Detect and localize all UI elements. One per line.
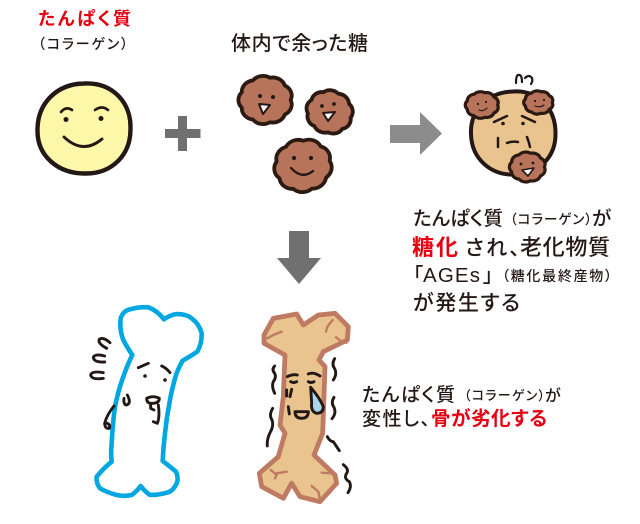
text: AGEs explanation: AGEs [423, 264, 480, 287]
icon: aged face with sugar blobs [465, 75, 556, 182]
icon: sugar blob top left [238, 76, 292, 124]
heading: excess sugar: 体内で余った糖 [231, 32, 368, 55]
icon: sugar blob bottom [270, 135, 335, 196]
text: AGEs explanation: （糖化最終産物） [502, 268, 612, 284]
text: AGEs explanation: 」 [483, 265, 493, 287]
heading: protein: たんぱく質 [38, 8, 131, 29]
text: AGEs explanation: 「 [413, 264, 423, 287]
text: bone deterioration explanation [362, 384, 561, 430]
arrow: down [277, 231, 321, 284]
text: AGEs explanation: たんぱく質 [413, 208, 503, 230]
arrow: right [390, 112, 442, 155]
text: AGEs explanation: （コラーゲン） [510, 212, 592, 227]
heading: protein: （コラーゲン） [38, 36, 128, 52]
text: AGEs explanation: 老化物質 [520, 235, 610, 260]
text: bone deterioration explanation: （コラーゲン） [464, 388, 545, 403]
text: bone deterioration explanation: たんぱく質 [362, 384, 455, 406]
text: AGEs explanation: され、 [465, 237, 520, 260]
text: bone deterioration explanation: 骨が劣化する [431, 407, 547, 430]
icon: healthy blue bone character [91, 307, 202, 496]
icon: plus sign [165, 116, 200, 151]
text: AGEs explanation [412, 208, 612, 315]
text: AGEs explanation: が [592, 208, 612, 230]
icon: smiling yellow protein face [37, 83, 131, 174]
heading: protein [38, 8, 131, 52]
text: AGEs explanation: 糖化 [412, 235, 458, 260]
text: bone deterioration explanation: が [545, 386, 561, 405]
text: bone deterioration explanation: 変性し、 [362, 408, 430, 430]
text: AGEs explanation: が発生する [413, 292, 520, 315]
icon: sugar blob top right [301, 85, 357, 139]
icon: deteriorated tan bone character [259, 313, 350, 502]
